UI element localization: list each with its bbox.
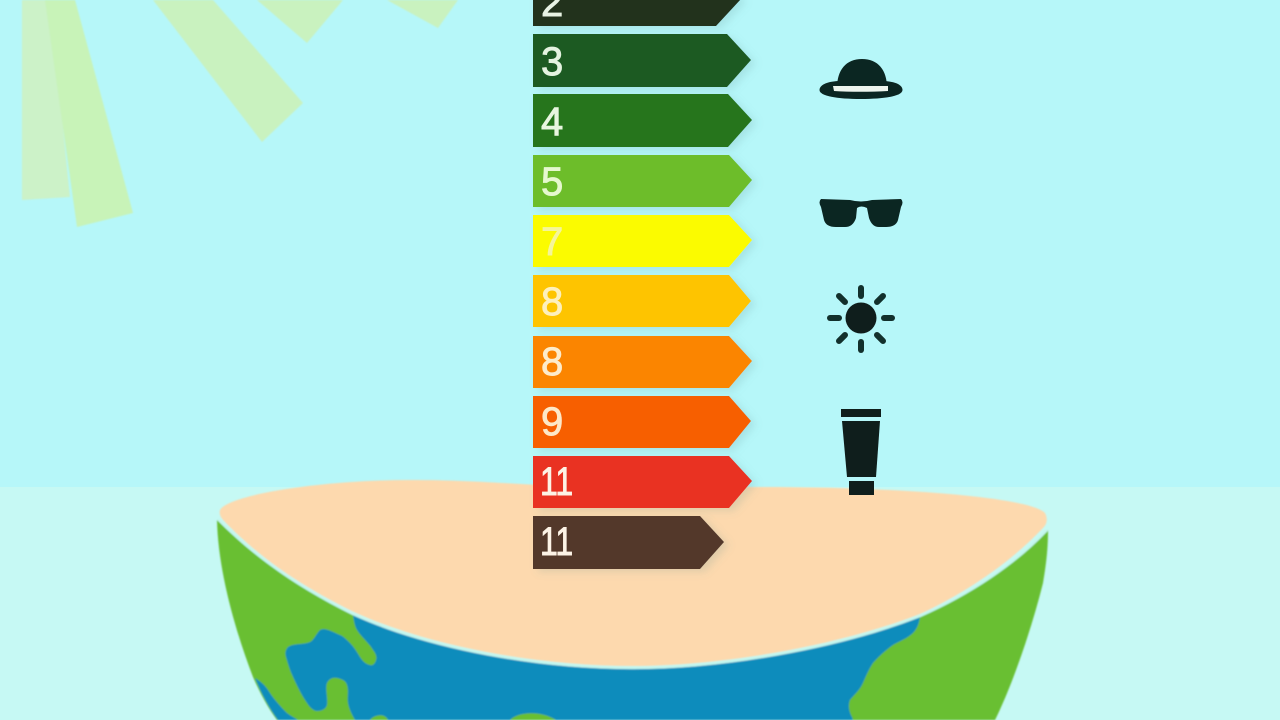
bar 5 xyxy=(533,155,752,207)
bar 9: 9 xyxy=(541,400,563,444)
sand cross-section xyxy=(220,480,1047,666)
bar 11 red xyxy=(533,456,752,508)
ocean xyxy=(285,615,920,720)
icon: hat xyxy=(820,59,902,99)
globe land base xyxy=(217,520,1048,720)
sun rays xyxy=(22,0,458,227)
bar 11 brown: 11 xyxy=(540,519,573,564)
bar 8 yellow-orange: 8 xyxy=(541,280,563,324)
bar 8 orange xyxy=(533,336,752,388)
globe bowl xyxy=(217,480,1048,720)
bar 3: 3 xyxy=(541,40,563,84)
sky background xyxy=(0,0,1280,487)
bar 4 xyxy=(533,94,752,147)
icon: sun xyxy=(830,288,892,350)
bar 4: 4 xyxy=(541,100,563,144)
rating scale xyxy=(533,0,752,569)
bar 7 xyxy=(533,215,752,267)
ocean lower left xyxy=(255,678,298,720)
bar 3 xyxy=(533,34,751,87)
ground background xyxy=(0,487,1280,720)
bar 8 yellow-orange xyxy=(533,275,751,327)
bar 7: 7 xyxy=(541,220,563,264)
rim highlight xyxy=(218,519,1047,668)
icon: sunglasses xyxy=(820,199,902,227)
bar 2 xyxy=(533,0,741,26)
icon: sunscreen tube xyxy=(841,409,881,495)
bar 9 xyxy=(533,396,751,448)
bar 8 orange: 8 xyxy=(541,340,563,384)
bar 11 brown xyxy=(533,516,724,569)
bar 11 red: 11 xyxy=(540,459,573,504)
small land patches xyxy=(370,713,556,720)
bar 5: 5 xyxy=(541,160,563,204)
